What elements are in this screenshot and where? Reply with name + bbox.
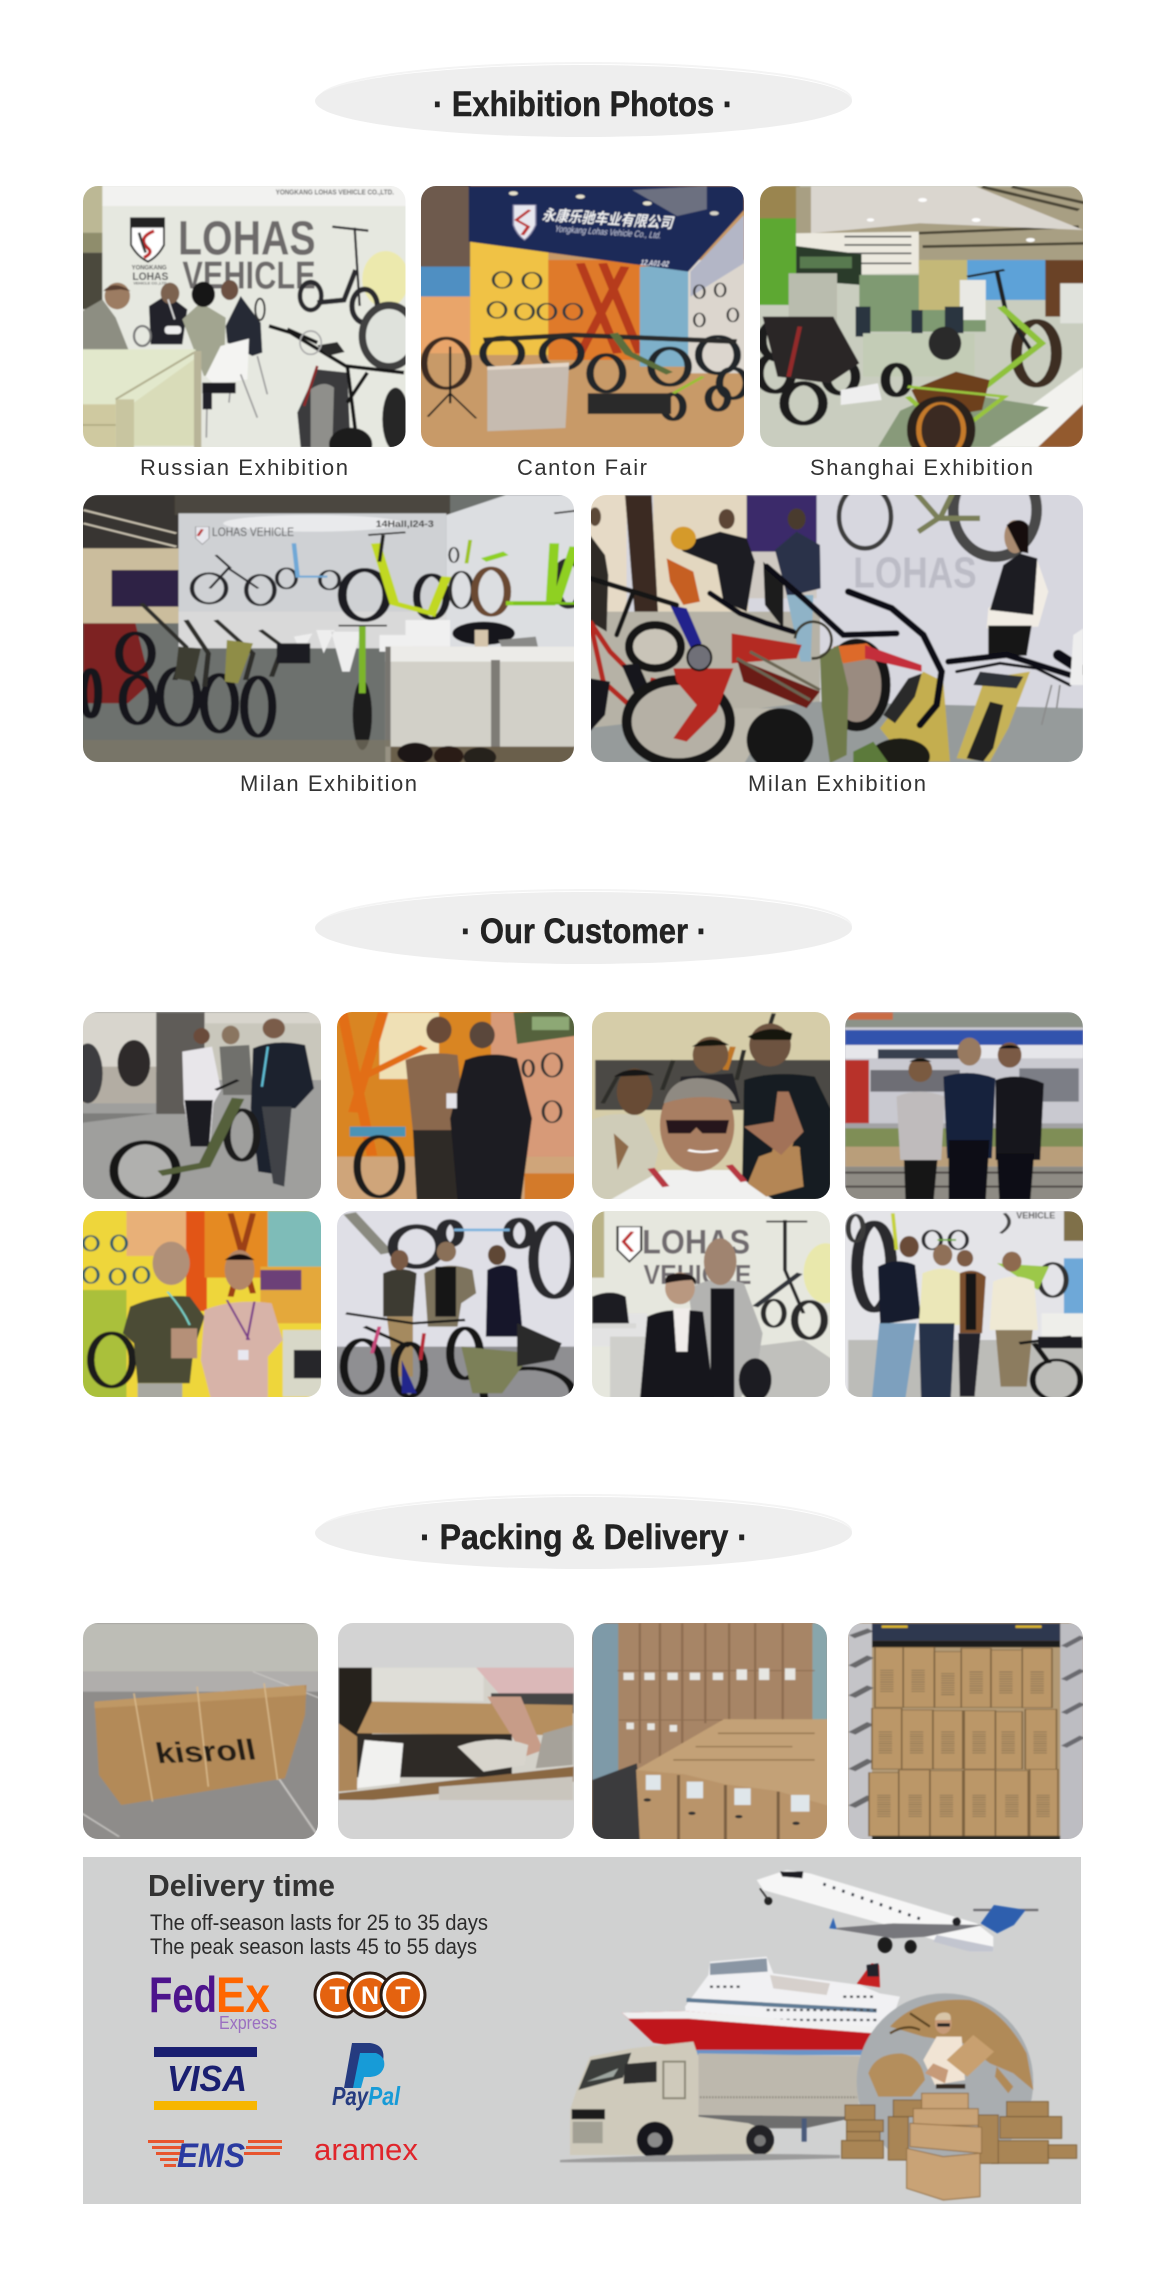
photo: customer group with scooter <box>73 1010 327 1202</box>
big red bike <box>827 643 886 727</box>
photo: man and woman at LOHAS wall: VEHICLE <box>644 1259 752 1290</box>
heading: Our Customer <box>315 890 852 964</box>
photo: Canton Fair booth: Yongkang Lohas Vehicle Co., Ltd. <box>554 223 663 240</box>
photo: Canton Fair booth: 永康乐驰车业有限公司 <box>540 206 677 232</box>
logo: TNT: N <box>361 1982 379 2010</box>
photo: stacked cartons in container <box>588 1622 833 1842</box>
heading: Exhibition Photos: · Exhibition Photos · <box>433 85 733 124</box>
yellow bikes <box>880 672 950 762</box>
photo: Shanghai Exhibition booth <box>755 183 1090 462</box>
panel: delivery time <box>83 1857 1081 2204</box>
illustration: plane, ship, truck, globe and boxes <box>560 1870 1077 2200</box>
foreground bike <box>362 305 416 367</box>
heading: Delivery time: Delivery time <box>148 1868 335 1903</box>
desk <box>83 348 196 404</box>
green scooter <box>1016 322 1056 385</box>
seated people <box>82 299 128 349</box>
photo: Russian Exhibition booth: YONGKANG LOHAS VEHICLE CO.,LTD. <box>276 187 394 196</box>
photo: Russian Exhibition booth: LOHAS <box>178 211 316 265</box>
logo: FedEx: Express <box>219 2013 277 2033</box>
background left <box>591 495 628 612</box>
chair <box>206 339 249 384</box>
photo: three men in front of a train <box>841 1010 1090 1202</box>
logo: EMS <box>148 2137 282 2175</box>
heading: Exhibition Photos <box>315 63 852 137</box>
logo: FedEx: Fed <box>149 1967 217 2023</box>
photo: two men at colourful booth <box>331 1009 580 1202</box>
bikes <box>483 337 746 419</box>
photo: three men with bikes against white wall <box>331 1208 580 1418</box>
photo: selfie with thumbs up <box>588 1010 837 1202</box>
logo: PayPal <box>332 2043 401 2111</box>
heading: Packing & Delivery: · Packing & Delivery · <box>420 1518 748 1557</box>
handlebars <box>710 567 1082 725</box>
logo: FedEx <box>149 1967 277 2033</box>
photo: bike being packed into carton <box>331 1622 580 1842</box>
photo: Russian Exhibition booth: YONGKANG <box>132 264 167 271</box>
front man <box>610 1170 774 1200</box>
photo: Milan Exhibition bikes close-up: LOHAS <box>853 550 977 598</box>
white platform <box>990 367 1083 447</box>
scooter on the wall <box>300 227 377 323</box>
heading: Packing & Delivery <box>315 1495 852 1569</box>
logo: VISA: VISA <box>167 2058 247 2099</box>
photo: kisroll carton <box>78 1622 324 1842</box>
truck <box>560 2042 860 2162</box>
caption: Shanghai Exhibition: Shanghai Exhibition <box>810 455 1033 480</box>
logo: TNT <box>315 1973 425 2017</box>
black item on counter <box>452 622 515 645</box>
ship <box>622 1957 900 2055</box>
logo: FedEx: Ex <box>216 1967 270 2023</box>
counter <box>385 660 574 762</box>
photo: Canton Fair booth: 12.A01-02 <box>639 258 670 269</box>
photo: man and woman at LOHAS wall <box>588 1208 848 1402</box>
thumbs <box>748 1146 804 1197</box>
photo: Milan Exhibition bikes close-up <box>591 495 1083 762</box>
photo: Russian Exhibition booth <box>81 183 416 461</box>
dark bikes <box>759 320 908 423</box>
front green bike <box>353 680 372 750</box>
text: peak season: The peak season lasts 45 to 55 days <box>150 1934 477 1959</box>
logo: TNT: T <box>395 1982 411 2010</box>
wall bikes <box>192 555 339 605</box>
caption: Canton Fair: Canton Fair <box>517 455 647 480</box>
bike row <box>83 623 150 703</box>
photo: Milan Exhibition booth: 14Hall,I24-3 <box>376 519 434 529</box>
caption: Milan Exhibition right: Milan Exhibition <box>748 771 926 796</box>
wall wheels <box>836 495 1043 563</box>
caption: Russian Exhibition: Russian Exhibition <box>140 455 348 480</box>
logo: EMS: EMS <box>177 2137 245 2175</box>
photo: Milan Exhibition booth: LOHAS VEHICLE <box>212 525 294 539</box>
logo: VISA <box>154 2047 257 2110</box>
blue bike <box>670 605 702 650</box>
white furniture <box>294 630 361 672</box>
boxes <box>842 2093 1077 2200</box>
photo: four people with bikes <box>841 1208 1090 1400</box>
logo shield <box>131 218 164 262</box>
red left bike <box>591 619 656 706</box>
photo: cartons loaded in container <box>844 1622 1090 1842</box>
scooter <box>227 1110 257 1160</box>
bikes <box>344 1328 573 1418</box>
heading: Our Customer: · Our Customer · <box>461 912 707 951</box>
photo: man and woman at LOHAS wall: LOHAS <box>642 1223 750 1261</box>
globe <box>857 1993 1033 2170</box>
photo: four people with bikes: VEHICLE <box>1016 1210 1055 1220</box>
wall bikes <box>488 272 582 320</box>
text: off-season: The off-season lasts for 25 to 35 days <box>150 1910 488 1935</box>
photo: Canton Fair booth <box>417 183 751 450</box>
logo: TNT: T <box>329 1982 345 2010</box>
photo: Russian Exhibition booth: VEHICLE <box>182 255 316 298</box>
logo: PayPal: Pal <box>368 2081 401 2111</box>
plane <box>757 1870 1038 1953</box>
men <box>677 532 755 612</box>
photo: Russian Exhibition booth: VEHICLE CO.,LTD <box>133 280 167 285</box>
woman <box>987 558 1048 628</box>
men <box>182 1047 221 1147</box>
photo: Russian Exhibition booth: LOHAS <box>132 271 168 283</box>
caption: Milan Exhibition left: Milan Exhibition <box>240 771 417 796</box>
photo: kisroll carton: kisroll <box>153 1735 259 1770</box>
people <box>878 1261 921 1325</box>
logo: PayPal: Pay <box>332 2081 369 2111</box>
logo: aramex: aramex <box>314 2132 418 2167</box>
photo: Milan Exhibition booth <box>78 493 583 767</box>
photo: two men at yellow booth wall <box>78 1208 327 1403</box>
delivery man <box>923 2013 994 2089</box>
olive bike <box>746 708 814 762</box>
